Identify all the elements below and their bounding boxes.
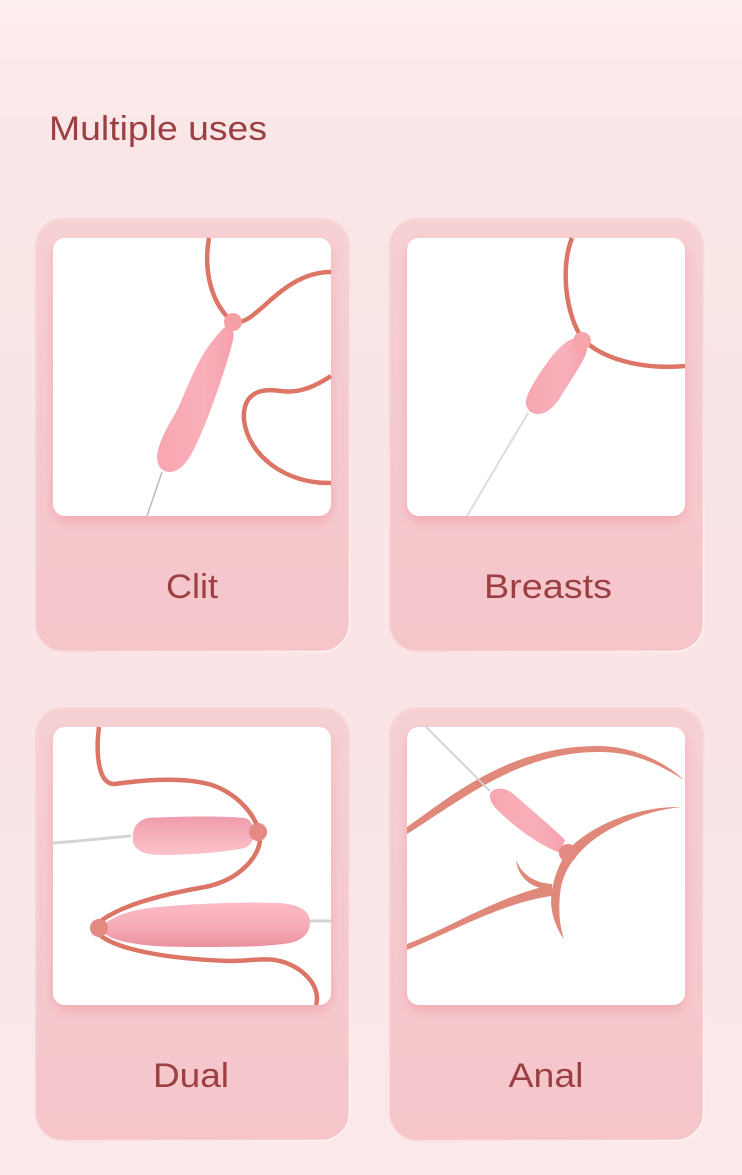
vibrator: [526, 339, 587, 414]
lower cable: [309, 920, 331, 922]
body outline: [566, 238, 685, 367]
label: breasts: Breasts: [484, 568, 612, 606]
title: Multiple uses: [49, 110, 267, 148]
lower contact dot: [90, 919, 108, 937]
image card: breasts illustration: [407, 238, 685, 516]
vibrator: [490, 789, 565, 853]
upper cable: [53, 836, 131, 843]
panel: anal: [390, 708, 704, 1140]
panel: dual: [36, 708, 350, 1140]
lower thigh curve: [407, 885, 552, 950]
upper body curve: [407, 746, 684, 834]
panel: clit: [36, 218, 350, 652]
body outline lower: [244, 376, 331, 483]
cable: [426, 727, 490, 791]
label: clit: Clit: [166, 568, 219, 606]
label: dual: Dual: [153, 1057, 229, 1095]
cable: [467, 413, 528, 516]
contact dot: [224, 313, 242, 331]
panel: breasts: [390, 218, 704, 652]
central crescent: [551, 807, 682, 939]
image card: dual illustration: [53, 727, 331, 1005]
lower vibrator: [103, 903, 310, 947]
upper vibrator: [133, 816, 254, 855]
vibrator: [157, 327, 234, 472]
cable: [147, 472, 162, 516]
image card: clit illustration: [53, 238, 331, 516]
label: anal: Anal: [508, 1057, 584, 1095]
upper contact dot: [249, 823, 267, 841]
contact dot: [573, 332, 591, 350]
small hook: [516, 860, 552, 890]
contact dot: [559, 844, 577, 862]
body outline: [94, 727, 317, 1005]
body outline upper: [207, 238, 331, 322]
image card: anal illustration: [407, 727, 685, 1005]
